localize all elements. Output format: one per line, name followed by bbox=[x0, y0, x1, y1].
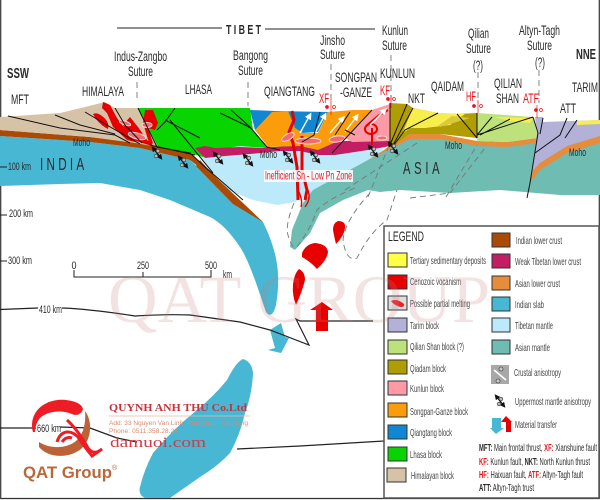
direction labels: SSW bbox=[7, 65, 30, 82]
material transfer: red arrow bbox=[310, 302, 333, 331]
dashed structural lines bbox=[137, 55, 539, 259]
legend labels left: Cenozoic vocanism bbox=[410, 276, 461, 288]
legend labels right: Crustal anisotropy bbox=[514, 367, 561, 379]
Tibetan mantle bbox=[195, 142, 392, 205]
legend swatches right bbox=[492, 233, 510, 354]
icon: crustal anisotropy bbox=[491, 365, 509, 384]
legend labels left: Tertiary sedimentary deposits bbox=[410, 255, 486, 267]
terrane labels: ATT bbox=[560, 100, 576, 116]
legend abbreviations: ATT: Altyn-Tagh trust bbox=[479, 483, 534, 494]
logo ring top bbox=[32, 400, 83, 432]
terrane labels: KUNLUN bbox=[380, 65, 415, 81]
scale bar: 250 bbox=[137, 260, 149, 272]
heading: Tibet: TIBET bbox=[226, 23, 263, 38]
Tarim block bbox=[530, 117, 600, 180]
legend labels left bbox=[410, 255, 486, 482]
low Pn zone callout: Inefficient Sn - Low Pn Zone bbox=[265, 170, 352, 182]
legend labels left: Lhasa block bbox=[410, 449, 442, 461]
material transfer: blue arrow bbox=[268, 323, 289, 353]
suture labels: Qilian bbox=[468, 25, 489, 41]
watermark: QAT GROUP bbox=[108, 261, 490, 337]
depth axis: 200 km bbox=[9, 208, 33, 220]
Cenozoic volcanism bbox=[93, 102, 158, 147]
white crustal flow arrows bbox=[300, 115, 310, 133]
legend title: LEGEND bbox=[388, 228, 424, 244]
thrust faults bbox=[8, 103, 577, 200]
legend labels right: Indian slab bbox=[515, 299, 544, 311]
legend labels left: Qiadam block bbox=[410, 363, 446, 375]
company info: Phone: 0511.358.28.28 bbox=[109, 428, 178, 435]
terrane labels: LHASA bbox=[185, 81, 212, 97]
cross-section: geological layers bbox=[0, 102, 600, 315]
suture labels: Suture bbox=[128, 63, 153, 79]
Himalayan block bbox=[0, 102, 158, 147]
legend labels left: Tarim block bbox=[410, 320, 439, 332]
legend abbreviations bbox=[479, 443, 597, 494]
Moho labels bbox=[73, 137, 586, 161]
registered mark: ® bbox=[112, 464, 118, 472]
suture labels: Indus-Zangbo bbox=[114, 48, 167, 64]
terrane labels bbox=[11, 65, 598, 116]
depth axis: 300 km bbox=[8, 255, 32, 267]
volcanic conduits bbox=[289, 111, 307, 200]
terrane labels: SONGPAN bbox=[335, 69, 377, 85]
suture labels: Altyn-Tagh bbox=[519, 22, 560, 38]
Qilian Shan block bbox=[477, 113, 537, 142]
company info: Add: 33 Nguyen Van Linh - Hai Chau - Da Nang bbox=[109, 420, 248, 427]
legend labels right: Asian mantle bbox=[515, 342, 550, 354]
legend labels left: Himalayan block bbox=[411, 470, 454, 482]
direction labels bbox=[7, 46, 596, 82]
suture labels bbox=[114, 22, 560, 79]
fault position markers bbox=[326, 95, 542, 118]
terrane labels: QILIAN bbox=[494, 75, 522, 91]
Tertiary sedimentary deposits bbox=[402, 108, 465, 134]
scale bar: km bbox=[223, 269, 232, 281]
depth axis: 410 km bbox=[39, 304, 62, 316]
terrane labels: -GANZE bbox=[340, 84, 372, 100]
company info: QUYNH ANH THU Co.Ltd bbox=[109, 402, 247, 414]
suture labels: (?) bbox=[473, 57, 483, 73]
icon: material transfer arrows bbox=[490, 416, 512, 434]
Kunlun block bbox=[345, 104, 390, 142]
legend labels left: Possible partial melting bbox=[410, 298, 470, 310]
terrane labels: HIMALAYA bbox=[82, 83, 124, 99]
Songpan-Ganze block bbox=[255, 110, 372, 150]
icon: mantle anisotropy bbox=[496, 396, 504, 406]
suture labels: Suture bbox=[320, 46, 345, 62]
legend labels left: Qilian Shan block (?) bbox=[410, 341, 464, 353]
legend swatches left bbox=[387, 253, 407, 482]
legend labels left: Songpan-Ganze block bbox=[410, 406, 468, 418]
legend labels right bbox=[514, 235, 591, 431]
plate labels: INDIA bbox=[40, 155, 87, 175]
scale bar: 500 bbox=[205, 260, 217, 272]
Weak Tibetan lower crust bbox=[195, 140, 390, 158]
Moho labels: Moho bbox=[260, 149, 277, 161]
depth axis: 660 km bbox=[37, 423, 61, 435]
legend panel bbox=[384, 226, 599, 498]
Qiangtang block bbox=[250, 110, 328, 133]
possible partial melting bbox=[119, 119, 387, 144]
legend labels left: Kunlun block bbox=[410, 383, 444, 395]
company info: damuoi.com bbox=[110, 435, 206, 451]
scale bar bbox=[72, 260, 232, 281]
legend labels left: Qiangtang block bbox=[410, 427, 452, 439]
Moho labels: Moho bbox=[445, 140, 462, 152]
suture labels: (?) bbox=[535, 54, 545, 70]
logo: QAT Group bbox=[23, 400, 118, 482]
suture labels: Kunlun bbox=[382, 22, 408, 38]
company info bbox=[109, 402, 250, 451]
fault labels bbox=[319, 82, 539, 106]
terrane labels: QIANGTANG bbox=[264, 83, 315, 99]
fault labels: HF bbox=[466, 88, 476, 104]
fault labels: XF bbox=[319, 90, 329, 106]
fault labels: ATF bbox=[523, 90, 539, 106]
suture labels: Suture bbox=[238, 62, 263, 78]
suture labels: Bangong bbox=[233, 47, 268, 63]
terrane labels: SHAN bbox=[496, 90, 519, 106]
legend labels right: Asian lower crust bbox=[515, 278, 560, 290]
Indian lower crust bbox=[0, 130, 263, 222]
plate labels: ASIA bbox=[403, 158, 443, 179]
fault labels: KF bbox=[380, 82, 390, 98]
logo name: QAT Group bbox=[23, 463, 112, 482]
terrane labels: QAIDAM bbox=[431, 78, 464, 94]
Asian lower crust Tarim bbox=[530, 136, 600, 183]
melt blobs bbox=[293, 221, 345, 305]
legend labels right: Indian lower crust bbox=[516, 235, 562, 247]
terrane labels: MFT bbox=[11, 91, 29, 107]
suture labels: Suture bbox=[466, 40, 491, 56]
mantle discontinuity lines bbox=[0, 308, 384, 449]
Lhasa block bbox=[138, 108, 268, 157]
depth axis: 100 km bbox=[8, 161, 31, 173]
detached slab bbox=[140, 359, 253, 498]
scale bar: 0 bbox=[72, 260, 76, 272]
Qaidam block bbox=[390, 103, 477, 147]
Indian slab bbox=[0, 136, 278, 315]
Asian mantle bbox=[290, 138, 600, 250]
suture labels: Suture bbox=[382, 37, 407, 53]
logo swirl bbox=[57, 420, 102, 456]
Kunlun volcanism bbox=[365, 110, 388, 145]
depth axis bbox=[0, 161, 62, 435]
suture labels: Jinsho bbox=[320, 32, 345, 48]
legend labels right: Material transfer bbox=[515, 419, 557, 431]
Moho labels: Moho bbox=[569, 147, 586, 159]
logo ring bottom bbox=[39, 411, 90, 456]
Asian lower crust bbox=[368, 134, 537, 160]
terrane labels: NKT bbox=[408, 90, 425, 106]
low Pn zone callout bbox=[264, 170, 353, 182]
suture labels: Suture bbox=[527, 37, 552, 53]
legend labels right: Tibetan mantle bbox=[515, 320, 553, 332]
plate labels bbox=[40, 155, 443, 179]
Moho labels: Moho bbox=[73, 137, 90, 149]
mantle anisotropy symbols bbox=[153, 143, 397, 167]
